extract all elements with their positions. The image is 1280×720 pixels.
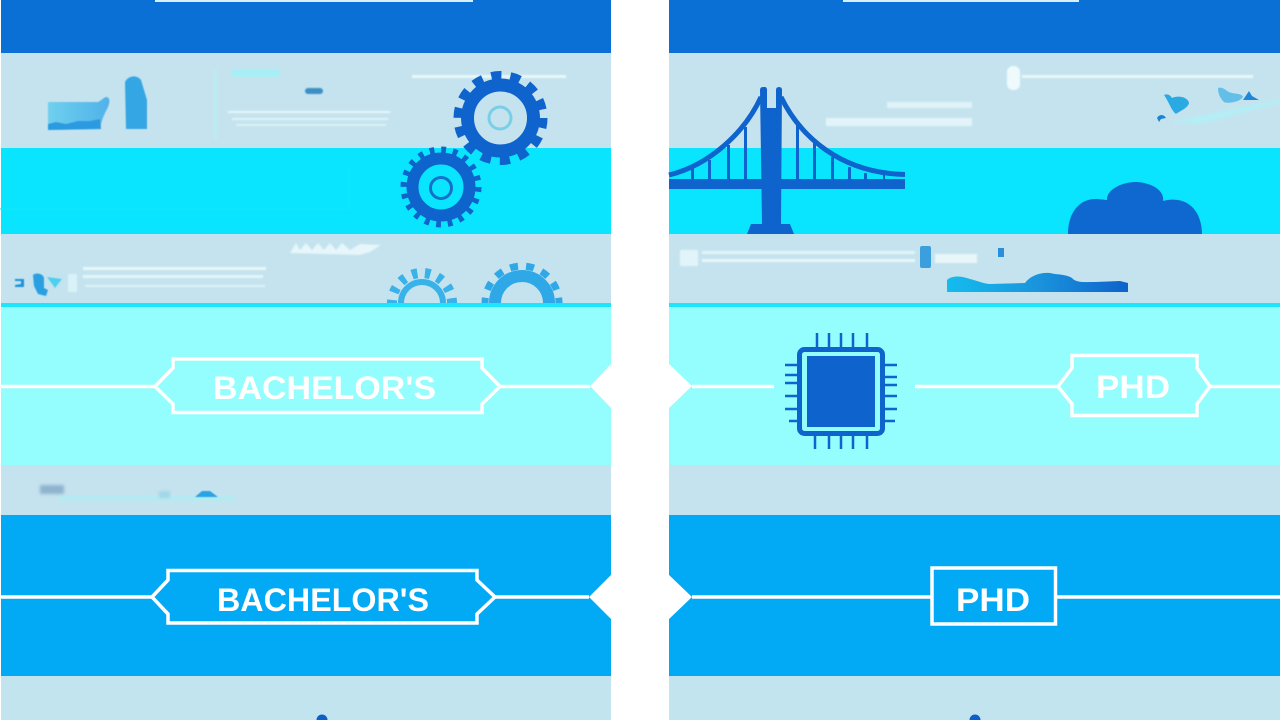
divider: faded vertical rule — [214, 70, 217, 140]
panel: right column — [669, 0, 1280, 720]
text block: faded lower right copy — [680, 246, 1004, 268]
label: PhD: PHD — [956, 582, 1030, 618]
icon: faded islands — [1157, 88, 1280, 124]
arrow: lower right notch — [668, 574, 692, 620]
text block: faded upper right copy — [826, 102, 972, 126]
icon: large gear — [458, 76, 542, 160]
icon: half gears on band edge — [387, 262, 562, 303]
icon: faded landscape — [947, 273, 1128, 292]
badge outline — [1058, 356, 1210, 416]
label: PhD: PHD — [1096, 369, 1170, 405]
panel: left column — [1, 0, 611, 720]
heading: upper bachelor's connector — [0, 359, 590, 412]
arrow: upper right notch — [668, 363, 692, 409]
heading: lower bachelor's connector — [0, 570, 589, 623]
label: Bachelor's: BACHELOR'S — [213, 370, 436, 406]
arrow: lower left notch — [589, 574, 612, 620]
faint box in cyan band — [0, 168, 349, 209]
heading: lower PhD connector — [692, 568, 1280, 624]
badge outline — [932, 568, 1056, 624]
badge outline — [152, 570, 495, 623]
arrow: upper left notch — [590, 363, 612, 409]
icon: small gear — [404, 150, 478, 224]
heading: upper PhD connector — [692, 356, 1280, 416]
icon: faded tower — [125, 76, 147, 129]
text block: faded upper left copy — [228, 69, 566, 126]
icon: left pin top — [316, 714, 328, 720]
icon: right pin top — [970, 714, 980, 720]
icon: microchip — [785, 333, 897, 449]
label: Bachelor's: BACHELOR'S — [217, 582, 429, 618]
badge outline — [155, 359, 500, 412]
icon: pale pin and rule — [1007, 66, 1253, 90]
text block: faded smudges in lower band — [40, 485, 235, 500]
icon: cloud — [1068, 182, 1202, 234]
icon: suspension bridge — [669, 87, 905, 234]
icon: faded building — [48, 97, 109, 130]
icon: faded left glyphs — [15, 274, 62, 296]
text block: faded lower left copy — [68, 243, 381, 292]
